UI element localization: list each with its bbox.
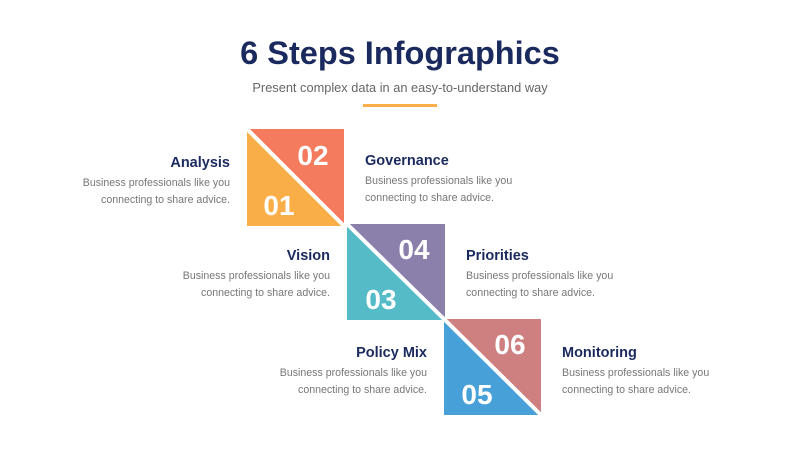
step: Priorities: [466, 248, 613, 299]
step: Monitoring: Monitoring: [562, 345, 637, 361]
square 01/02: 01: [263, 190, 295, 221]
step: Analysis: [83, 155, 230, 206]
square 05/06: 06: [494, 329, 526, 360]
square 05/06: [442, 317, 543, 417]
step: Monitoring: connecting to share advice.: [562, 384, 691, 396]
step: Governance: Governance: [365, 153, 449, 169]
square 01/02: 02: [297, 140, 329, 171]
step: Vision: connecting to share advice.: [201, 287, 330, 299]
step: Priorities: connecting to share advice.: [466, 287, 595, 299]
square 03/04: 04: [398, 234, 430, 265]
step: Priorities: Business professionals like you: [466, 270, 613, 282]
square 03/04: 03: [365, 284, 397, 315]
step: Monitoring: [562, 345, 709, 396]
step: Vision: Vision: [287, 248, 330, 264]
step: Policy Mix: Policy Mix: [356, 345, 427, 361]
step: Governance: connecting to share advice.: [365, 192, 494, 204]
step: Policy Mix: Business professionals like you: [280, 367, 427, 379]
step: Policy Mix: connecting to share advice.: [298, 384, 427, 396]
step: Policy Mix: [280, 345, 427, 396]
step: Analysis: connecting to share advice.: [101, 194, 230, 206]
step: Vision: Business professionals like you: [183, 270, 330, 282]
title: 6 Steps Infographics: [240, 35, 560, 71]
step: Governance: Business professionals like you: [365, 175, 512, 187]
square 01/02: [245, 127, 346, 228]
step: Monitoring: Business professionals like you: [562, 367, 709, 379]
step: Priorities: Priorities: [466, 248, 529, 264]
step: Analysis: Business professionals like you: [83, 177, 230, 189]
subtitle: Present complex data in an easy-to-understand way: [252, 80, 548, 95]
step: Vision: [183, 248, 330, 299]
accent underline: [363, 104, 437, 107]
square 03/04: [345, 222, 447, 322]
step: Governance: [365, 153, 512, 204]
step: Analysis: Analysis: [170, 155, 230, 171]
square 05/06: 05: [461, 379, 493, 410]
